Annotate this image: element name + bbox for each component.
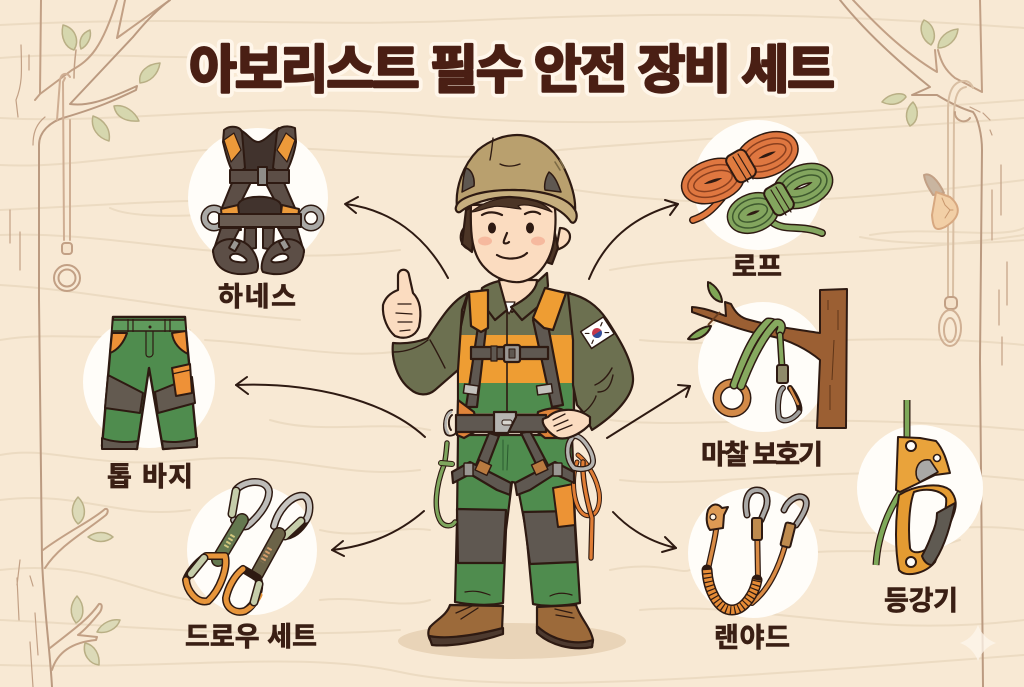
quickdraws backing circle: [187, 485, 317, 615]
arrow: to pants: [236, 377, 425, 437]
panel: lanyard: [688, 488, 818, 653]
flag patch: [581, 317, 614, 348]
arrow: to lanyard: [613, 512, 676, 552]
shoulder straps and chest strap: [463, 288, 566, 407]
label: 드로우 세트: 드로우 세트: [185, 622, 317, 652]
lanyard backing circle: [688, 488, 818, 618]
panel: rope: [684, 120, 832, 282]
pants icon: [102, 317, 197, 449]
head with helmet and face: [456, 135, 577, 282]
panel: quickdraws: [185, 482, 317, 652]
ascender backing circle: [857, 425, 983, 551]
panel: ascender: [857, 400, 983, 616]
figure: arborist: [383, 135, 633, 659]
right arm with cuff: [568, 293, 633, 430]
ground shadow: [398, 623, 626, 659]
waist belt with buckle: [444, 400, 563, 438]
panel: harness: [188, 126, 328, 312]
label: 로프: 로프: [732, 252, 782, 282]
rope backing circle: [693, 120, 823, 250]
arrow: to quickdraws: [332, 511, 424, 556]
rope icon: green coil: [728, 163, 832, 233]
boots: [428, 605, 593, 648]
green rope on hip: [436, 443, 455, 526]
left arm with cuff: [393, 293, 468, 394]
quickdraw icons: [186, 482, 310, 612]
tree limb and trunk: [688, 282, 847, 428]
decoration: corner sparkle: [960, 625, 996, 661]
label: 등강기: 등강기: [884, 586, 958, 616]
label: 톱 바지: 톱 바지: [107, 462, 193, 492]
trousers: [455, 435, 580, 606]
panel: friction saver: [688, 282, 847, 470]
label: 마찰 보호기: 마찰 보호기: [701, 440, 823, 470]
friction saver rope, ring and carabiner: [717, 322, 799, 420]
lanyard icon: [707, 490, 806, 610]
harness icon: [204, 126, 320, 274]
title: 아보리스트 필수 안전 장비 세트: [189, 42, 835, 100]
decoration: upper right tree with rope and pulley: [840, 0, 1007, 687]
decoration: left tree with rope: [10, 0, 170, 687]
coiled orange rope on hip: [568, 436, 599, 558]
title: 아보리스트 필수 안전 장비 세트: [189, 42, 835, 100]
leg straps: [452, 431, 574, 495]
neck, collar and shirt: [480, 273, 548, 320]
pants backing circle: [83, 316, 215, 448]
arrow: to harness: [345, 197, 448, 278]
hand on hip: [543, 410, 590, 439]
arrow: to friction saver: [607, 385, 690, 438]
jacket torso: [458, 290, 574, 416]
arrow: to rope: [589, 200, 678, 279]
tool pouch: [553, 484, 575, 527]
ascender icon: [876, 400, 956, 574]
label: 하네스: 하네스: [218, 282, 296, 312]
friction saver backing circle: [698, 302, 828, 432]
panel: work pants: [83, 316, 215, 492]
decoration: lower left branches: [17, 497, 120, 687]
rope icon: orange coil: [684, 131, 797, 220]
thumbs-up hand: [383, 270, 420, 338]
label: 랜야드: 랜야드: [714, 623, 790, 653]
harness backing circle: [188, 128, 328, 268]
